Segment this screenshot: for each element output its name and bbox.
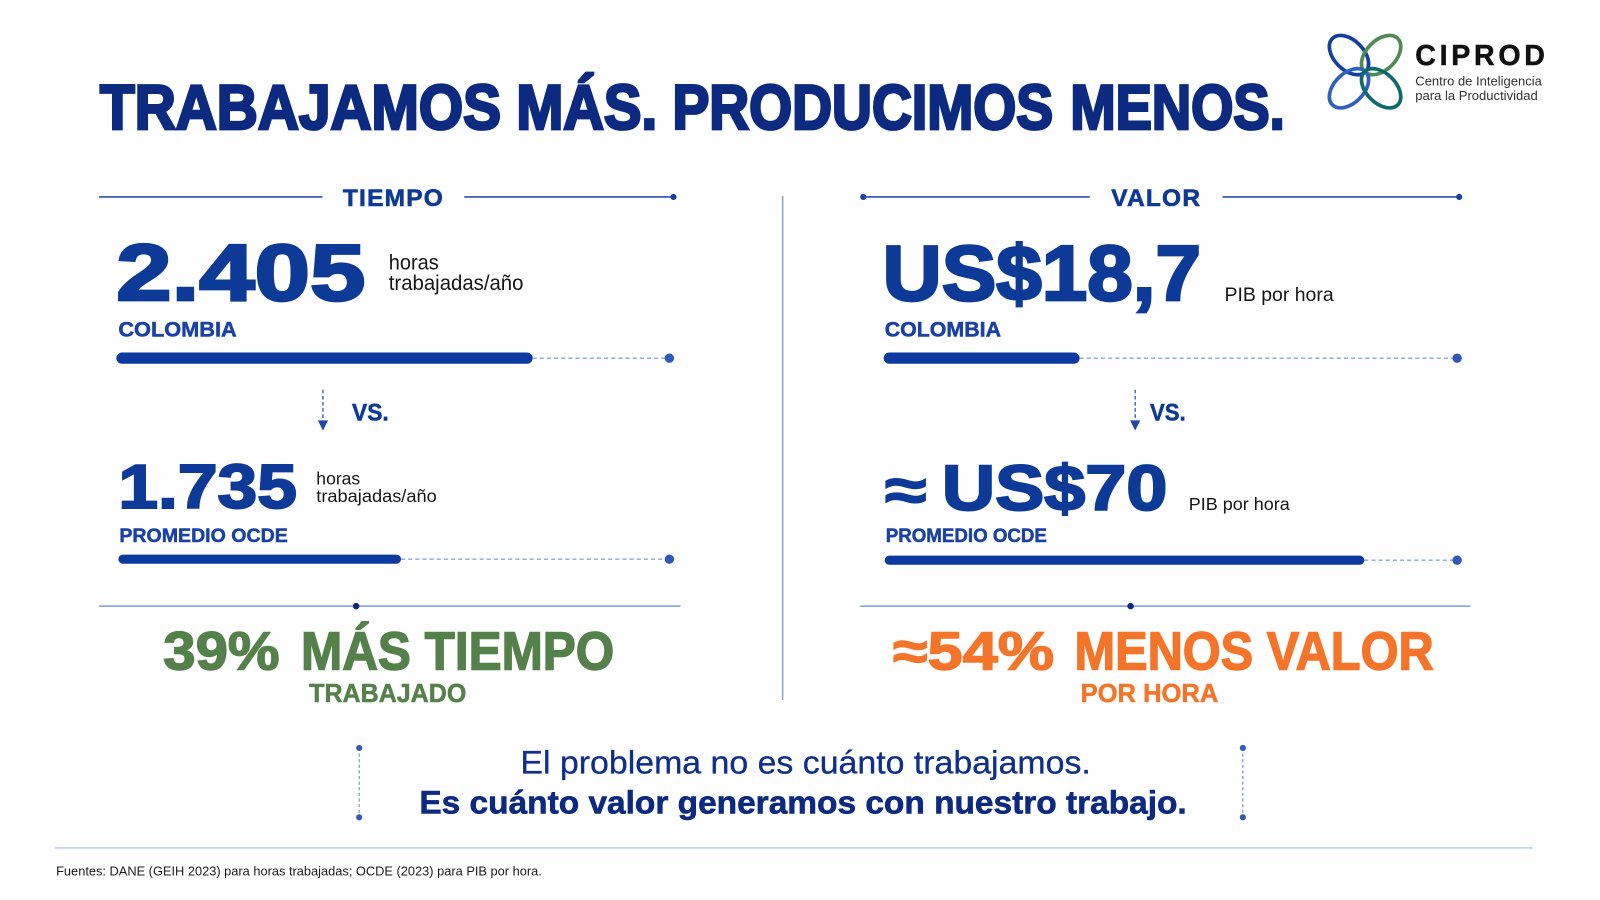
unit: hours per year: horas [316,469,361,489]
bar: OECD hours [118,554,674,564]
bar: Colombia GDP [884,353,1462,364]
section header: tiempo [99,185,677,212]
section header: tiempo: TIEMPO [343,185,443,212]
bar: Colombia hours [116,353,674,364]
callout line 2: Es cuánto valor generamos con nuestro trabajo. [419,783,1187,820]
title [100,73,1285,143]
arrow: versus [318,390,328,431]
section header: valor [860,185,1462,212]
icon: four-loop logo mark [1322,28,1408,115]
callout line 1: El problema no es cuánto trabajamos. [520,743,1091,780]
result: less value: ≈54% [893,621,1054,681]
panel: tiempo [99,185,681,708]
logo tagline line 2: para la Productividad [1415,88,1538,103]
unit: GDP per hour: PIB por hora [1189,494,1290,514]
result: more time: 39% [163,621,280,681]
panel: valor [860,185,1470,708]
logo tagline: Centro de Inteligencia [1415,74,1542,89]
unit: hours per year [389,251,523,295]
title: TRABAJAMOS [100,73,501,143]
vs label: VS. [1150,399,1186,426]
unit: hours per year: trabajadas/año [389,272,523,295]
result: more time [163,621,614,681]
arrow: versus [1130,390,1140,431]
vs label: VS. [352,399,389,426]
title: MENOS. [1070,73,1285,143]
label: Colombia: COLOMBIA [885,318,1001,342]
result: less value: MENOS VALOR [1074,621,1434,681]
logo: CIPROD [1322,28,1545,115]
metric: Colombia GDP per hour: US$18,7 [883,231,1201,317]
bar: OECD GDP [885,556,1462,565]
unit: hours per year: horas [389,251,439,274]
label: OECD average: PROMEDIO OCDE [119,525,288,547]
unit: hours per year [316,469,437,506]
title: PRODUCIMOS [672,73,1053,143]
result: more time: MÁS TIEMPO [301,621,614,681]
result subtitle: POR HORA [1081,680,1218,708]
section header: valor: VALOR [1111,185,1200,212]
logo name: CIPROD [1415,40,1545,72]
result subtitle: TRABAJADO [309,680,466,708]
metric: OECD GDP per hour: US$70 [942,452,1167,524]
source note: Fuentes: DANE (GEIH 2023) para horas trabajadas; OCDE (2023) para PIB por hora. [56,864,542,879]
label: OECD average: PROMEDIO OCDE [886,525,1047,547]
result: less value [893,621,1434,681]
metric: OECD hours: 1.735 [118,453,297,522]
title: MÁS. [516,73,657,143]
callout: conclusion [356,743,1246,820]
unit: GDP per hour: PIB por hora [1224,284,1334,306]
approx sign: ≈ [885,456,927,524]
metric: Colombia hours: 2.405 [116,228,365,317]
label: Colombia: COLOMBIA [118,318,237,342]
unit: hours per year: trabajadas/año [316,486,437,506]
